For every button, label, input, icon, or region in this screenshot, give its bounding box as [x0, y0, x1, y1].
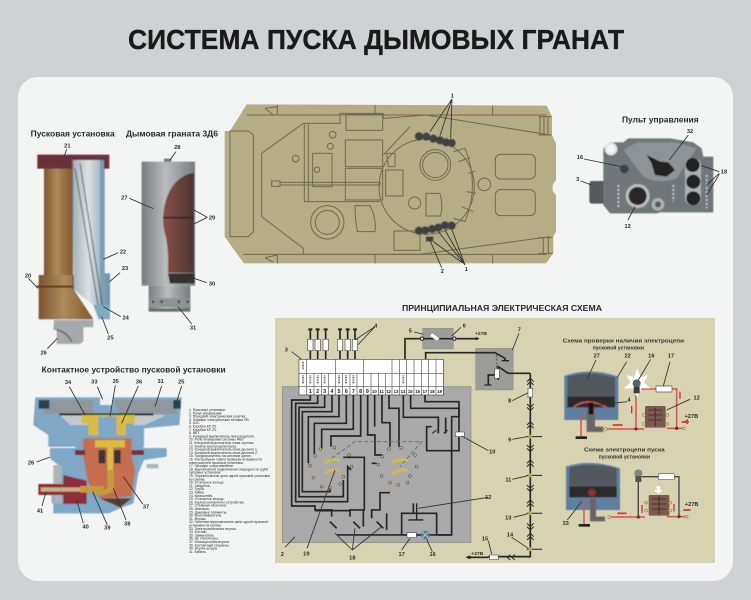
schematic callouts: 7 — [518, 327, 521, 333]
schematic callouts: 2 — [281, 552, 284, 558]
legend list: 13. Концевой выключатель люка десанта 1. — [189, 448, 258, 452]
dashed switch linkage — [332, 442, 422, 467]
callout numbers and leader lines: 23 — [122, 266, 128, 272]
legend list: 17. Гасящее сопротивление. — [189, 464, 234, 468]
terminal strip 3: 1 — [309, 389, 312, 395]
terminal strip 3: 13 — [394, 389, 399, 394]
callout numbers and leader lines: 20 — [25, 274, 31, 280]
panel: launcher and grenade — [25, 129, 219, 356]
terminal strip 3 — [299, 359, 443, 395]
tank outline details — [230, 105, 553, 263]
contact device callouts: 31 — [158, 379, 164, 385]
relay contacts 10 — [432, 430, 464, 437]
terminal strip 3: 9 — [366, 389, 369, 395]
legend list: пусковых установок. — [189, 471, 221, 475]
legend list: 12. Кнопка электроцепи пуска. — [189, 444, 237, 448]
lower circuit — [579, 469, 691, 527]
upper circuit — [576, 368, 689, 439]
relay 7 — [426, 348, 530, 390]
tank callouts: 1 — [451, 94, 454, 100]
legend list: 40. Втулка штыря. — [189, 547, 218, 551]
tank callouts: 2 — [441, 269, 444, 275]
callout numbers and leader lines: 31 — [190, 326, 196, 332]
upper callouts: 22 — [625, 354, 631, 360]
legend list: 29. Дымовые элементы. — [189, 510, 227, 514]
upper callouts: 12 — [694, 395, 700, 401]
terminal strip 3: 4 — [331, 389, 334, 395]
terminal strip 3: 10 — [372, 389, 377, 394]
panel: tank top view — [225, 94, 556, 275]
heading: check circuit — [563, 338, 684, 351]
legend list: 27. Стальная оболочка. — [189, 504, 226, 508]
schematic callouts: 3 — [285, 347, 288, 353]
console callouts: 18 — [721, 169, 727, 175]
schematic callouts: 13 — [505, 515, 511, 521]
callout numbers and leader lines: 28 — [174, 145, 180, 151]
console illustration — [589, 138, 713, 213]
panel: electrical schematic background — [275, 318, 715, 563]
heading: launcher: Пусковая установка — [31, 129, 115, 138]
upper callouts: 27 — [594, 354, 600, 360]
fuses 4 — [308, 329, 358, 359]
legend list: 34. Контакт. — [189, 530, 207, 534]
terminal strip 3: 18 — [430, 389, 435, 394]
terminal strip 3: 16 — [415, 389, 421, 394]
legend list: 4. Плавкие электрические вставки ПВ. — [189, 418, 250, 422]
legend list: 30. Воспламенитель. — [189, 514, 222, 518]
heading: check circuit: Схема проверки наличия электроцепи — [563, 338, 684, 344]
schematic callouts: 15 — [482, 537, 488, 543]
legend list: 35. Замыкатель. — [189, 533, 215, 537]
grenade illustration — [142, 159, 195, 312]
legend list: 23. Гайка. — [189, 490, 205, 494]
lower callouts: 33 — [563, 521, 569, 527]
tank callouts — [430, 94, 468, 275]
panel: circuit diagrams — [563, 338, 700, 527]
title: СИСТЕМА ПУСКА ДЫМОВЫХ ГРАНАТ — [128, 24, 624, 55]
contact device callouts — [28, 379, 184, 531]
legend list: электроцепей пусковых установок. — [189, 461, 244, 465]
legend list: 28. Шпилька. — [189, 507, 210, 511]
terminal strip 3: 5 — [338, 389, 341, 395]
legend list: 32. Галетник переключателя цепи одной пусковой — [189, 520, 268, 524]
terminal strip 3: 6 — [345, 389, 348, 395]
schematic callouts: 11 — [505, 477, 511, 483]
switches 18 — [330, 522, 383, 528]
heading: grenade: Дымовая граната 3Д6 — [126, 129, 219, 138]
legend list: 41. Кабель. — [189, 550, 207, 554]
contact device callouts: 25 — [178, 379, 184, 385]
legend list: 24. Кронштейн. — [189, 494, 213, 498]
terminal strip 3: 15 — [408, 389, 413, 394]
legend list: 10. Реле блокировки системы ФВУ. — [189, 438, 244, 442]
heading: launch circuit — [584, 447, 665, 461]
chain of switches — [466, 337, 542, 560]
lower callouts: +27В — [685, 502, 698, 508]
legend list: 20. Стопорное кольцо. — [189, 481, 225, 485]
terminal strip 3: 14 — [401, 389, 406, 394]
heading: launch circuit: Схема электроцепи пуска — [584, 447, 665, 453]
schematic callouts: +27В — [471, 551, 484, 557]
legend list: 15. Предохранитель на силовом щитке. — [189, 454, 252, 458]
button 12 — [408, 503, 423, 520]
upper launcher section — [564, 371, 618, 432]
launcher illustration — [37, 155, 110, 344]
terminal strip 3: 11 — [379, 389, 385, 394]
schematic callouts: 12 — [485, 495, 491, 501]
terminal strip 3: 19 — [437, 389, 443, 394]
schematic callouts: 19 — [303, 551, 309, 557]
legend list: 36, 38. Изоляторы. — [189, 537, 219, 541]
block 6 — [405, 328, 478, 359]
contact device cross-section — [33, 396, 182, 513]
legend list: 14. Концевой выключатель люка десанта 2. — [189, 451, 258, 455]
console callouts — [576, 129, 727, 230]
legend list: 11. Концевой выключатель люка стрелка. — [189, 441, 254, 445]
heading: console: Пульт управления — [622, 115, 699, 124]
schematic callouts: 4 — [374, 323, 378, 329]
schematic diagram — [281, 323, 542, 561]
callout numbers and leader lines: 29 — [209, 216, 215, 222]
terminal strip 3: 2 — [316, 389, 319, 395]
legend list: 8. ВБТ. — [189, 431, 200, 435]
contact device callouts: 36 — [136, 379, 142, 385]
lamp 16 and resistor 17 — [407, 531, 430, 539]
schematic callouts: 18 — [349, 555, 355, 561]
contact device callouts: 38 — [124, 521, 130, 527]
contact device callouts: 34 — [65, 380, 72, 386]
contact device callouts: 26 — [28, 461, 34, 467]
legend list: 31. Втулка. — [189, 517, 206, 521]
terminal strip 3: 17 — [423, 389, 428, 394]
callout numbers and leader lines — [25, 144, 215, 356]
switches 19 — [309, 446, 418, 489]
schematic callouts: 16 — [430, 552, 436, 558]
schematic callouts: +27В — [475, 331, 487, 337]
legend list: 1. Пусковые установки. — [189, 408, 226, 412]
schematic callouts: 14 — [507, 533, 514, 539]
schematic callouts: 8 — [508, 399, 511, 405]
heading: launch circuit: пусковой установки — [599, 454, 650, 461]
terminal strip 3: 3 — [323, 389, 326, 395]
schematic callouts: 9 — [508, 437, 511, 443]
contact device callouts: 35 — [113, 379, 119, 385]
upper callouts — [587, 354, 700, 420]
legend list: 22. Труба. — [189, 487, 205, 491]
console callouts: 12 — [625, 224, 631, 230]
callout numbers and leader lines: 30 — [209, 282, 215, 288]
schematic callouts: 17 — [399, 552, 405, 558]
legend list: 16. Контрольная лампа проверки исправности — [189, 458, 262, 462]
tank hull — [225, 104, 556, 263]
console callouts: 16 — [577, 155, 583, 161]
lower callouts — [563, 502, 698, 527]
schematic callouts — [281, 323, 528, 561]
terminal strip 3: 12 — [386, 389, 392, 394]
heading: contact device: Контактное устройство пусковой установки — [42, 365, 226, 374]
legend list: 2. Пульт управления. — [189, 411, 222, 415]
callout numbers and leader lines: 26 — [41, 350, 47, 356]
panel: control console — [576, 115, 727, 230]
contact device callouts: 41 — [37, 509, 43, 515]
schematic callouts: 6 — [463, 323, 466, 329]
console callouts: 32 — [687, 129, 693, 135]
legend list: 3. Передняя электрическая розетка. — [189, 415, 246, 419]
contact device callouts: 39 — [104, 525, 110, 531]
wiring — [292, 395, 459, 535]
tank callouts: 1 — [465, 267, 468, 273]
upper callouts: +27В — [684, 414, 698, 420]
upper callouts: 16 — [648, 354, 654, 360]
legend list: 9. Концевой выключатель люка водителя. — [189, 434, 255, 438]
callout numbers and leader lines: 21 — [64, 144, 70, 150]
contact device callouts: 33 — [91, 380, 97, 386]
main white panel — [18, 77, 733, 581]
legend list: 7. Коробка КР-25. — [189, 428, 217, 432]
legend list: 33. Электрозапальная втулка. — [189, 527, 236, 531]
callout numbers and leader lines: 27 — [121, 196, 127, 202]
smoke grenade launchers — [415, 132, 456, 241]
upper callouts: 4 — [627, 398, 631, 404]
legend list: 39. Контактный стержень. — [189, 543, 230, 547]
legend list — [189, 408, 270, 554]
legend list: из группы. — [189, 477, 205, 481]
schematic callouts: 10 — [489, 449, 495, 455]
callout numbers and leader lines: 25 — [107, 336, 113, 342]
gray control block — [282, 387, 471, 543]
contact device callouts: 37 — [143, 505, 149, 511]
heading: check circuit: пусковой установки — [593, 344, 644, 351]
legend list: 25. Стопорное кольцо. — [189, 497, 225, 501]
legend list: 37. Изоляционная втулка. — [189, 540, 230, 544]
legend list: 18. Выключатели подключения очередности групп — [189, 467, 268, 471]
callout numbers and leader lines: 22 — [120, 249, 126, 255]
legend list: 21. Запорное. — [189, 484, 211, 488]
legend list: установки из группы. — [189, 524, 222, 528]
legend list: 26. Корпус контактного устройства. — [189, 500, 245, 504]
legend list: 6. Коробка КР-25. — [189, 424, 217, 428]
callout numbers and leader lines: 24 — [123, 316, 130, 322]
contact device callouts: 40 — [83, 524, 89, 530]
upper callouts: 17 — [668, 354, 674, 360]
heading: electrical schematic: ПРИНЦИПИАЛЬНАЯ ЭЛЕКТРИЧЕСКАЯ СХЕМА — [402, 304, 602, 313]
terminal strip 3: 7 — [352, 389, 355, 395]
schematic callouts: 5 — [409, 329, 412, 335]
lower launcher section — [566, 463, 620, 521]
legend list: 5. АЗС. — [189, 421, 200, 425]
legend list: 19. Переключатель цепи одной пусковой установки — [189, 474, 270, 478]
terminal strip 3: 8 — [359, 389, 362, 395]
panel: contact device — [28, 365, 226, 531]
console callouts: 3 — [576, 177, 579, 183]
